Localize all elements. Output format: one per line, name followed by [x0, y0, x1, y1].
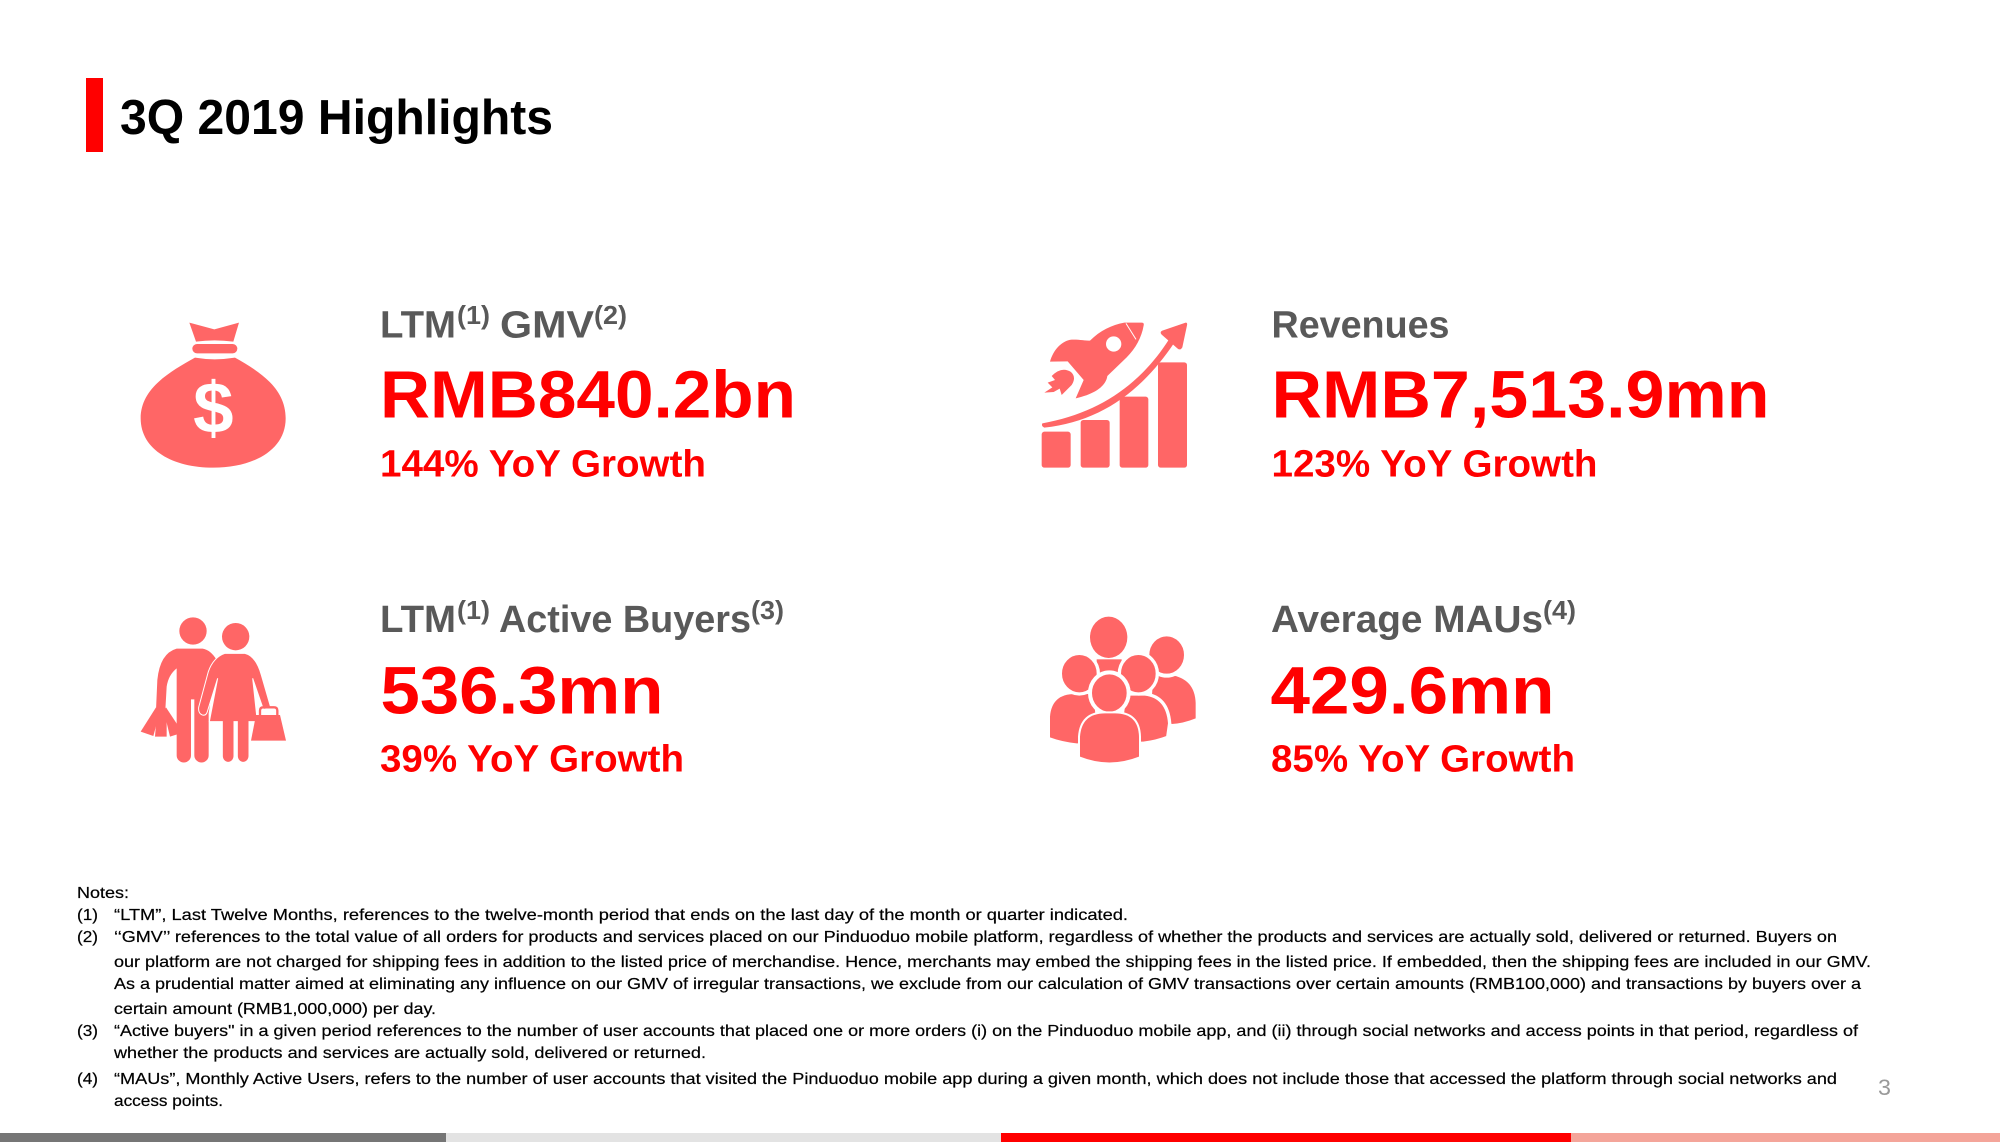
footer colour band: [0, 1133, 2000, 1142]
footnotes: access points.: [114, 1093, 223, 1110]
icon: couple with shopping bags: [141, 617, 286, 762]
heading: LTM Active Buyers: LTM: [380, 599, 456, 641]
panel: Average MAUs: [1050, 595, 1576, 780]
footnotes: “MAUs”, Monthly Active Users, refers to the number of user accounts that visited the Pinduoduo mobile app during a given month, which does not include those that accessed the platform through social networks and: [114, 1071, 1837, 1088]
panel: LTM GMV: [141, 300, 796, 486]
heading: LTM Active Buyers: (1): [457, 595, 490, 625]
heading: LTM GMV: GMV: [500, 304, 595, 346]
footnotes: whether the products and services are actually sold, delivered or returned.: [113, 1045, 706, 1062]
title accent bar: [86, 78, 103, 152]
footnotes: (3): [77, 1023, 98, 1040]
page number: 3: [1878, 1075, 1891, 1100]
value: GMV: RMB840.2bn: [380, 358, 796, 432]
heading: LTM Active Buyers: (3): [751, 595, 784, 625]
heading: LTM Active Buyers: Active Buyers: [499, 599, 751, 641]
heading: LTM GMV: LTM: [380, 304, 456, 346]
heading: LTM GMV: (2): [594, 300, 627, 330]
heading: Average MAUs: (4): [1543, 595, 1576, 625]
heading: LTM Active Buyers: [380, 595, 784, 641]
icon: rocket and rising bar chart: [1042, 323, 1187, 468]
title: [86, 78, 553, 152]
value: Revenues: RMB7,513.9mn: [1272, 358, 1770, 432]
heading: LTM GMV: [380, 300, 627, 346]
icon: money bag: [141, 323, 286, 468]
icon: money bag: $: [193, 368, 234, 449]
panel: LTM Active Buyers: [141, 595, 784, 780]
heading: LTM GMV: (1): [457, 300, 490, 330]
footnotes: As a prudential matter aimed at eliminating any influence on our GMV of irregular transactions, we exclude from our calculation of GMV transactions over certain amounts (RMB100,000) and transactions by buyers over a: [114, 976, 1861, 993]
icon: group of users: [1050, 617, 1196, 762]
title text: 3Q 2019 Highlights: [120, 91, 553, 145]
value: MAUs: 429.6mn: [1270, 654, 1554, 728]
footnotes: Notes:: [77, 885, 129, 902]
heading: Revenues: Revenues: [1272, 304, 1450, 346]
footnotes: (1): [77, 907, 98, 924]
heading: Average MAUs: Average MAUs: [1271, 599, 1543, 641]
footnotes: our platform are not charged for shipping fees in addition to the listed price of merchandise. Hence, merchants may embed the shipping fees in the listed price. If embedded, then the shipping fees are included in our GMV.: [114, 954, 1871, 971]
footnotes: (4): [77, 1071, 98, 1088]
panel: Revenues: [1042, 304, 1770, 486]
footnotes: [77, 885, 1871, 1110]
footnotes: certain amount (RMB1,000,000) per day.: [114, 1001, 436, 1018]
growth: GMV: 144% YoY Growth: [380, 444, 706, 486]
footnotes: “Active buyers" in a given period references to the number of user accounts that placed one or more orders (i) on the Pinduoduo mobile app, and (ii) through social networks and access points in that period, regardless of: [114, 1023, 1859, 1040]
value: Active Buyers: 536.3mn: [380, 654, 664, 728]
footnotes: “LTM”, Last Twelve Months, references to the twelve-month period that ends on the last day of the month or quarter indicated.: [114, 907, 1128, 924]
footnotes: (2): [77, 929, 98, 946]
growth: MAUs: 85% YoY Growth: [1271, 738, 1575, 780]
footnotes: ‘‘GMV’’ references to the total value of all orders for products and services placed on our Pinduoduo mobile platform, regardless of whether the products and services are actually sold, delivered or returned. Buyers on: [114, 929, 1837, 946]
growth: Revenues: 123% YoY Growth: [1272, 444, 1598, 486]
growth: Active Buyers: 39% YoY Growth: [380, 738, 684, 780]
